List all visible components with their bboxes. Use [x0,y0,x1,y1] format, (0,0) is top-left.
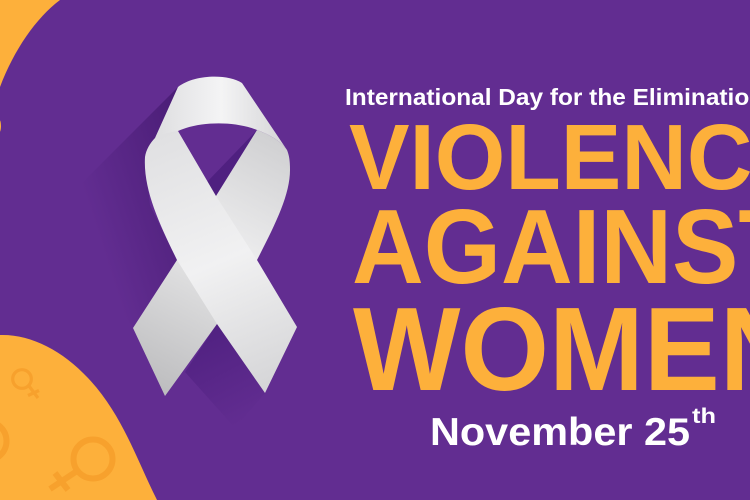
ribbon top loop [155,77,287,150]
bottom-left orange shape [0,335,157,500]
date: November 25 [430,411,690,454]
ribbon front strand [145,131,297,393]
ribbon long shadow [80,87,178,328]
icon: large female symbol [50,440,112,490]
top-left orange sliver [0,120,1,132]
icon: partial female symbol [0,422,6,460]
icon: small female symbol [13,370,39,398]
ribbon lower shadow [185,324,265,428]
silver ribbon [133,77,297,396]
top-left orange shape [0,0,60,87]
ribbon hole shadow [207,130,257,196]
ribbon back strand [133,130,290,396]
date suffix: th [692,405,716,428]
